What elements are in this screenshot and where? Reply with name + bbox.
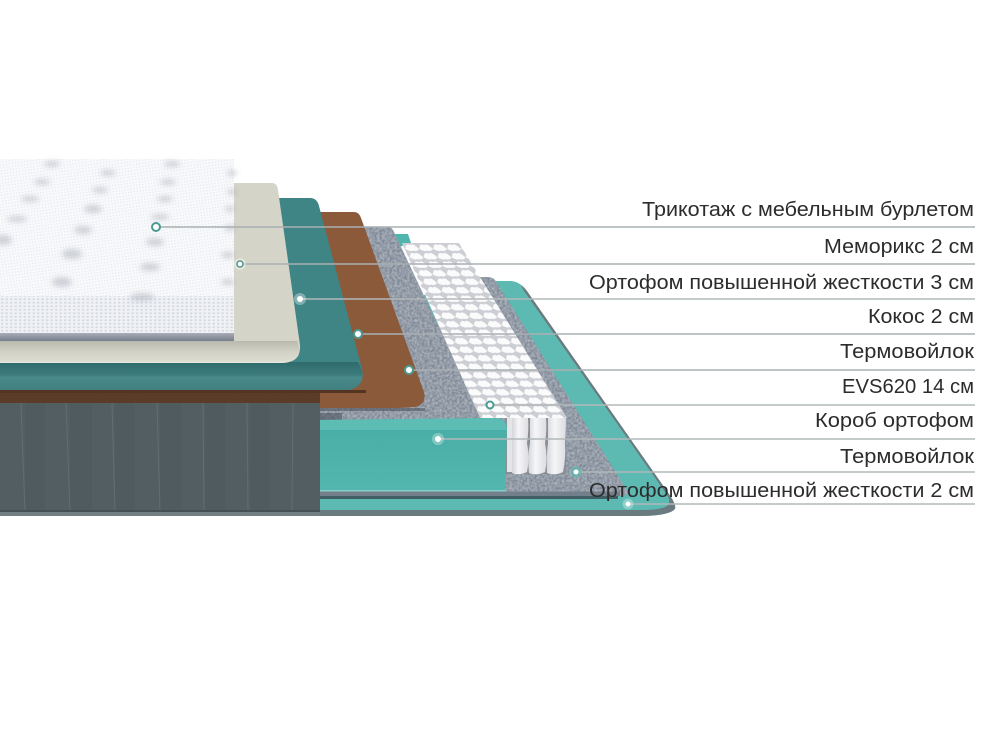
spring columns front: [505, 418, 566, 474]
layer: velvet side panel: [0, 403, 320, 516]
leader line and label: lower thermal felt: Термовойлок: [840, 446, 974, 468]
layer: coconut: [0, 212, 425, 411]
leader line and label: thermal felt: Термовойлок: [840, 341, 974, 363]
velvet panel shading: [25, 403, 270, 510]
layer: lower felt: [318, 277, 627, 499]
leader line and label: memorix: Меморикс 2 см: [824, 236, 974, 258]
layer: pocket springs: [402, 243, 567, 474]
layer: knitted cover: [0, 159, 237, 341]
layer: upper felt: [300, 227, 479, 420]
leader line and label: foam box: [432, 410, 975, 445]
layer: foam box: [320, 413, 620, 496]
leader line and label: coconut: [354, 306, 975, 338]
layer: teal foam strip behind springs: [393, 234, 411, 247]
leader line and label: EVS620 springs: EVS620 14 см: [842, 376, 974, 398]
leader line and label: memorix: [234, 236, 975, 270]
leader line and label: knit cover: [152, 199, 975, 231]
layer: memorix 2 cm: [0, 183, 300, 363]
layer: base teal foam: [0, 281, 675, 516]
leader line and label: knit cover: Трикотаж с мебельным бурлетом: [642, 199, 974, 221]
quilting dimples: [0, 161, 237, 301]
leader line and label: lower thermal felt: [570, 446, 975, 478]
leader line and label: orthofoam 2 cm: [589, 480, 975, 510]
leader line and label: thermal felt: [405, 341, 975, 374]
leader line and label: coconut: Кокос 2 см: [868, 306, 974, 328]
leader line and label: orthofoam 2 cm: Ортофом повышенной жесткости 2 см: [589, 480, 974, 502]
layer: teal orthofoam 3 cm: [0, 198, 363, 390]
leader line and label: orthofoam 3 cm: Ортофом повышенной жесткости 3 см: [589, 272, 974, 294]
leader line and label: foam box: Короб ортофом: [815, 410, 974, 432]
leader line and label: EVS620 springs: [486, 376, 975, 408]
leader line and label: orthofoam 3 cm: [294, 272, 975, 305]
